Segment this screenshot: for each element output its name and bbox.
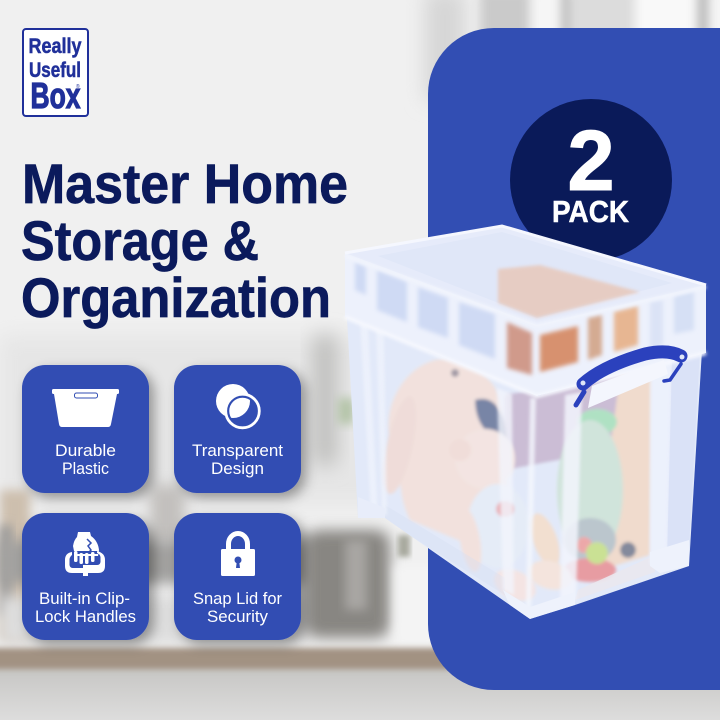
- label: [35, 589, 136, 626]
- label: Plastic: [62, 459, 109, 478]
- label: Design: [211, 459, 264, 478]
- title: Organization: [21, 266, 331, 329]
- box feet: [504, 540, 689, 619]
- product: transparent storage box: [345, 226, 706, 619]
- title: Storage &: [21, 209, 259, 272]
- box contents: [377, 359, 652, 607]
- front corner pillar: [497, 388, 582, 612]
- title: Master Home: [22, 152, 348, 215]
- label: [193, 589, 282, 626]
- label: Security: [207, 607, 268, 626]
- card: snap lid: [174, 513, 301, 640]
- box body: [347, 318, 702, 619]
- badge: 2 pack: [510, 99, 672, 261]
- logo: Useful: [29, 59, 81, 82]
- label: Built-in Clip-: [39, 589, 130, 608]
- card: durable plastic: [22, 365, 149, 493]
- label: [192, 441, 283, 478]
- icon: padlock: [221, 534, 255, 576]
- card: clip-lock handles: [22, 513, 149, 640]
- left face ribs: [360, 322, 387, 515]
- badge: 2 pack: 2: [567, 114, 615, 209]
- label: Durable: [55, 441, 116, 460]
- label: Transparent: [192, 441, 283, 460]
- icon: hand gripping handle: [65, 532, 105, 576]
- logo: Box: [30, 75, 80, 116]
- logo: Really: [28, 35, 82, 58]
- label: Lock Handles: [35, 607, 136, 626]
- card: transparent design: [174, 365, 301, 493]
- lid windows: [355, 262, 694, 359]
- logo: ®: [76, 83, 80, 90]
- badge: 2 pack: PACK: [552, 194, 630, 229]
- logo: [23, 29, 88, 116]
- blue handle: [576, 352, 684, 405]
- contents seen through lid: [507, 306, 638, 375]
- blue panel: [428, 28, 720, 690]
- box lid: [345, 226, 706, 396]
- label: Snap Lid for: [193, 589, 282, 608]
- white clip strap: [588, 360, 668, 408]
- label: [55, 441, 116, 478]
- icon: overlapping circles: [216, 384, 259, 428]
- title: [21, 152, 348, 329]
- icon: plastic tub: [52, 389, 119, 427]
